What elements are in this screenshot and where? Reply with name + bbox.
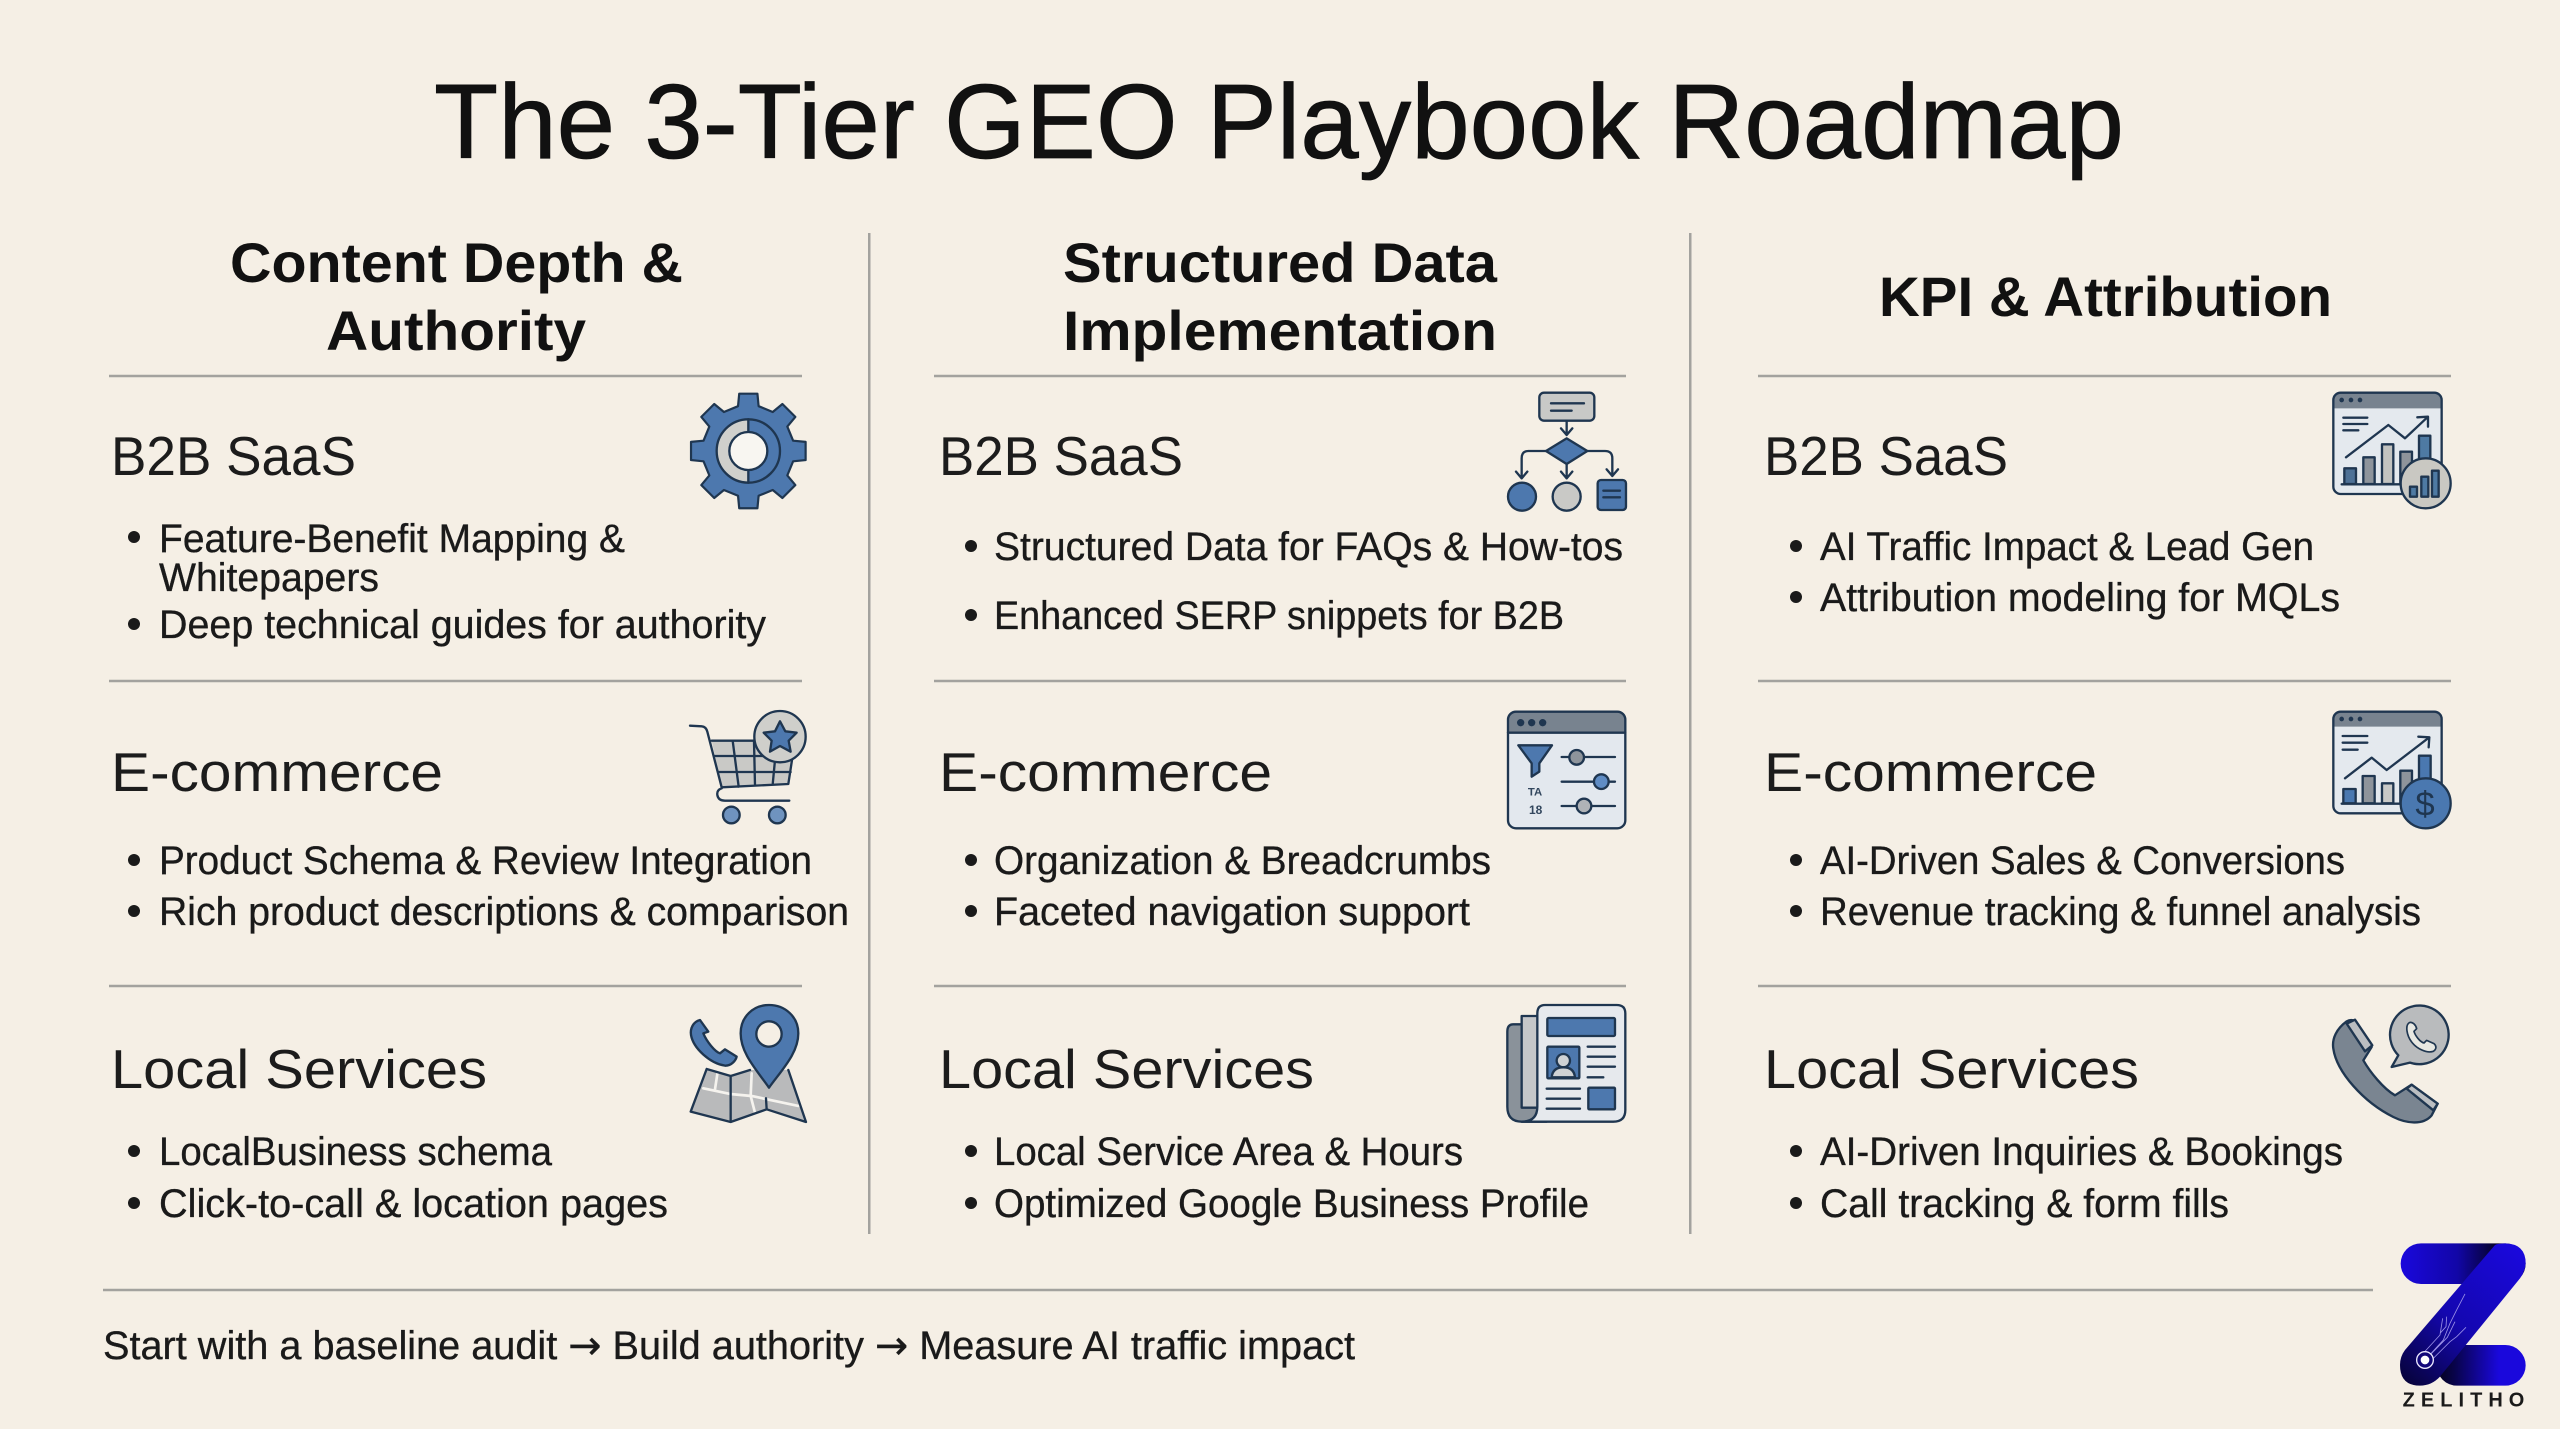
block: B2B SaaS KPI (1764, 425, 2340, 620)
block: B2B SaaS KPI: AI Traffic Impact & Lead Gen (1820, 525, 2314, 569)
block: B2B SaaS content: Deep technical guides for authority (159, 603, 766, 647)
block: Local Services structured data: Local Services (939, 1038, 1314, 1100)
block: B2B SaaS structured data: Enhanced SERP snippets for B2B (994, 594, 1564, 638)
block: B2B SaaS KPI: Attribution modeling for MQLs (1820, 576, 2340, 620)
block: B2B SaaS content: Feature-Benefit Mapping & (159, 517, 625, 561)
heading: structured data: Structured Data (1063, 231, 1498, 294)
icon: analytics window with dollar coin: $ (2415, 785, 2435, 823)
panel: content depth and authority (109, 231, 849, 1226)
block: E-commerce structured data: E-commerce (939, 741, 1272, 803)
icon: phone with chat bubble (2333, 1006, 2449, 1122)
block: E-commerce content (111, 741, 849, 934)
icon: flowchart (1508, 393, 1626, 511)
block: Local Services KPI (1764, 1038, 2343, 1226)
block: E-commerce KPI: AI-Driven Sales & Conversions (1820, 839, 2345, 883)
block: E-commerce KPI: E-commerce (1764, 741, 2097, 803)
block: Local Services content: LocalBusiness schema (159, 1130, 553, 1174)
block: B2B SaaS structured data: Structured Data for FAQs & How-tos (994, 525, 1623, 569)
panel: structured data implementation (934, 231, 1626, 1226)
heading: content depth: Content Depth & (230, 231, 683, 294)
heading: KPI: KPI & Attribution (1879, 265, 2332, 328)
icon: filter window: 18 (1529, 803, 1543, 817)
icon: newspaper (1507, 1005, 1625, 1122)
block: B2B SaaS content (111, 425, 766, 647)
block: E-commerce structured data: Faceted navigation support (994, 890, 1470, 934)
block: Local Services KPI: Call tracking & form fills (1820, 1182, 2229, 1226)
block: E-commerce content: E-commerce (111, 741, 443, 803)
icon: filter window (1508, 712, 1625, 828)
block: E-commerce content: Product Schema & Review Integration (159, 839, 812, 883)
block: Local Services content: Local Services (111, 1038, 487, 1100)
icon: map with pin and phone (691, 1005, 806, 1122)
heading: structured data: Implementation (1063, 299, 1497, 362)
block: E-commerce structured data (939, 741, 1491, 934)
block: Local Services KPI: AI-Driven Inquiries & Bookings (1820, 1130, 2343, 1174)
wordmark: ZELITHO (2403, 1390, 2524, 1412)
block: Local Services structured data: Local Service Area & Hours (994, 1130, 1463, 1174)
block: B2B SaaS KPI: B2B SaaS (1764, 425, 2008, 487)
block: B2B SaaS structured data: B2B SaaS (939, 425, 1183, 487)
block: E-commerce KPI: Revenue tracking & funnel analysis (1820, 890, 2421, 934)
block: Local Services content (111, 1038, 668, 1226)
logo: Zelitho (2400, 1243, 2526, 1412)
block: B2B SaaS structured data (939, 425, 1623, 638)
block: B2B SaaS content: Whitepapers (159, 556, 379, 600)
block: E-commerce KPI (1764, 741, 2421, 934)
block: Local Services structured data: Optimized Google Business Profile (994, 1182, 1589, 1226)
heading: content depth (230, 231, 683, 362)
panel: KPI and attribution (1758, 265, 2451, 1226)
heading: structured data (1063, 231, 1498, 362)
icon: gear (691, 394, 806, 508)
block: B2B SaaS content: B2B SaaS (111, 425, 356, 487)
heading: content depth: Authority (326, 299, 586, 362)
icon: filter window: TA (1528, 786, 1542, 798)
block: Local Services structured data (939, 1038, 1589, 1226)
block: Local Services KPI: Local Services (1764, 1038, 2139, 1100)
footer text: Start with a baseline audit → Build authority → Measure AI traffic impact (103, 1323, 1355, 1369)
block: E-commerce structured data: Organization & Breadcrumbs (994, 839, 1491, 883)
icon: analytics window with dollar coin (2333, 712, 2451, 828)
icon: shopping cart with star (690, 711, 806, 823)
title: The 3-Tier GEO Playbook Roadmap (434, 63, 2124, 181)
block: E-commerce content: Rich product descriptions & comparison (159, 890, 849, 934)
block: Local Services content: Click-to-call & location pages (159, 1182, 668, 1226)
icon: analytics window with bar badge (2333, 393, 2451, 508)
